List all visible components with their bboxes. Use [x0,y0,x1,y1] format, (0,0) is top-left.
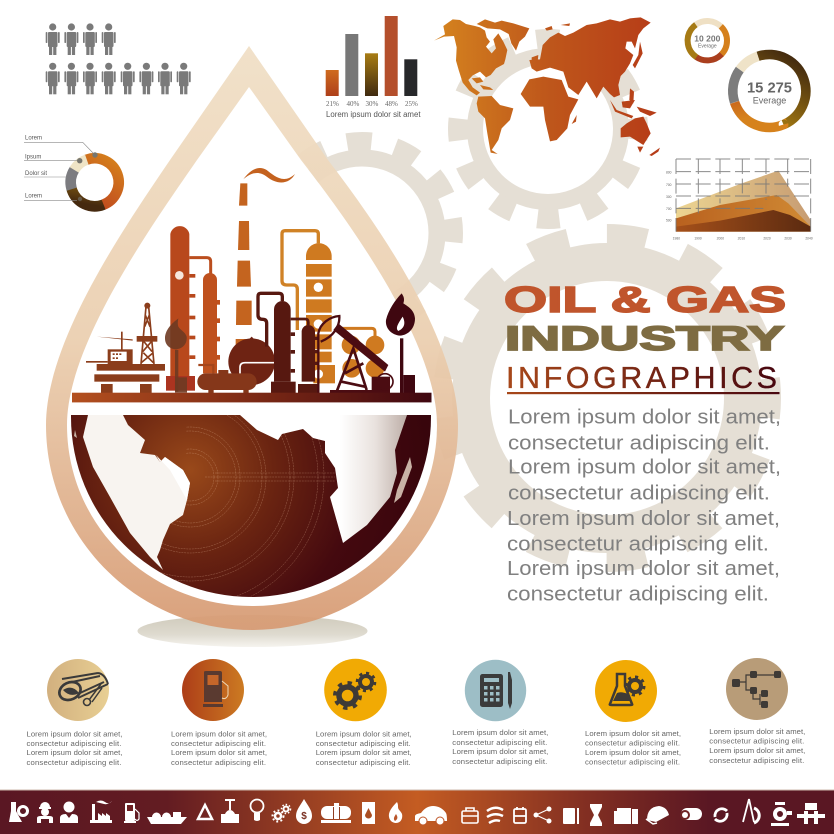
madagascar [572,115,577,124]
second red column [203,273,220,373]
caption 2: Lorem ipsum dolor sit amet, [171,748,267,757]
caption 4: Lorem ipsum dolor sit amet, [452,747,548,756]
oil drop frame [46,46,458,630]
large ring stat [718,40,820,142]
icon: worker [37,802,53,823]
caption 5: consectetur adipiscing elit. [585,757,680,766]
icon: flow tree [726,658,788,720]
tall red column [170,226,211,377]
caption 3: consectetur adipiscing elit. [316,758,411,767]
caribbean [480,85,493,90]
caption 2: consectetur adipiscing elit. [171,739,266,748]
icon: briefcase [462,808,478,823]
footer icon bar [0,790,834,834]
axis labels: 2030 [784,237,792,241]
gear: world map gear [448,29,648,229]
axis labels: 700 [666,207,672,211]
offshore platform [86,303,165,393]
caption 6 [709,727,805,765]
bar labels: 25% [405,100,418,108]
dark column [258,293,318,393]
icon: manager [60,802,78,823]
axis labels: 2000 [717,237,724,241]
caption 4: consectetur adipiscing elit. [452,738,547,747]
australia [621,117,651,145]
icon: calculator [563,808,579,824]
orange balls behind pumpjack [340,328,384,378]
donut chart with labels [24,136,128,215]
leader dots [77,152,98,201]
caption 5: consectetur adipiscing elit. [585,738,680,747]
small ring caption: Everage [698,43,717,49]
caption 3: consectetur adipiscing elit. [316,739,411,748]
chimney [236,183,253,367]
japan [633,42,643,68]
donut labels: Ipsum [25,154,41,160]
british isles [532,55,538,65]
bar labels: 40% [346,100,360,108]
caption 6: Lorem ipsum dolor sit amet, [709,727,805,736]
icon: drafting compass [743,799,759,823]
caption 5 [585,729,681,766]
icon: centrifugal pump [771,802,792,826]
icon: car [415,806,447,825]
icon: gears [324,659,387,721]
icon: hard hat [646,806,669,824]
icon: calculator and pen [465,660,526,721]
people pictogram [46,23,191,94]
africa [521,77,578,141]
caption 2: consectetur adipiscing elit. [171,758,266,767]
icon: pipeline valve [797,803,825,824]
pumpjack [318,316,393,393]
axis labels: 800 [666,171,672,175]
icon: box [614,808,638,824]
bar labels: 48% [385,100,398,108]
icon: fuel pump [182,659,244,721]
axis labels: 2020 [763,237,771,241]
drop shadow [138,615,368,647]
gear: large title gear [443,234,771,562]
body text: Lorem ipsum dolor sit amet, [508,456,781,478]
body text: consectetur adipiscing elit. [508,432,770,454]
body text [507,406,781,606]
icon: valve [221,799,239,823]
icon: barrel [362,802,375,824]
icon: fuel pump [124,803,139,823]
donut labels [25,136,47,200]
donut segments [62,149,128,215]
north america [434,19,507,95]
chart areas [676,171,811,232]
world map [434,17,660,156]
axis labels: 500 [666,219,672,223]
caption 3 [316,730,412,767]
right flare [386,293,415,393]
caption 6: consectetur adipiscing elit. [709,736,804,746]
title line 2: INDUSTRY [505,320,785,358]
sphere tank [228,337,275,385]
new guinea [637,107,657,116]
chart grid [676,159,811,232]
smoke plume [243,168,295,182]
refinery illustration [86,168,415,393]
donut labels: Dolor sit [25,171,47,177]
icon: recycle [198,805,212,819]
small ring value: 10 200 [694,34,721,44]
large ring caption: Everage [753,95,786,105]
south america [477,96,513,154]
new zealand [649,148,660,156]
eurasia [529,17,651,98]
axis labels: 300 [666,195,672,199]
caption 3: Lorem ipsum dolor sit amet, [316,730,412,738]
bar labels: 30% [366,100,378,108]
donut labels: Lorem [25,194,42,200]
orange distillation column [282,231,335,383]
greenland and arctic islands [477,19,529,51]
axis labels: 700 [666,183,672,187]
axis labels: 1980 [673,237,680,241]
gear: small centre gear [258,129,466,337]
icon: tanker ship [147,812,187,824]
icon: swirl arrows [487,808,503,823]
caption 2: Lorem ipsum dolor sit amet, [171,730,267,738]
caption 1: consectetur adipiscing elit. [26,758,122,767]
caption 5: Lorem ipsum dolor sit amet, [585,748,681,757]
caption 5: Lorem ipsum dolor sit amet, [585,729,681,738]
globe [71,415,431,597]
bar caption: Lorem ipsum dolor sit amet [326,110,421,119]
body text: consectetur adipiscing elit. [508,482,770,504]
donut labels: Lorem [25,136,42,142]
axis labels: 1990 [694,237,702,241]
icon: pipes [47,659,109,721]
icon: light bulb [250,800,264,821]
caption 2 [171,730,267,767]
axis labels [666,171,813,241]
ground bar [72,393,432,402]
caption 4: consectetur adipiscing elit. [452,757,547,766]
icon: oil money drop: $ [301,811,307,822]
large ring value: 15 275 [747,80,792,97]
person figures [46,23,191,94]
horizontal tank [197,365,257,393]
icon: flame [389,802,402,823]
icon: flask gear [9,802,28,822]
icon: cycle arrows [715,809,727,821]
icon: hourglass [590,804,602,826]
body text: Lorem ipsum dolor sit amet, [507,558,780,580]
sumatra and java [610,100,633,118]
iceland [545,26,553,31]
body text: Lorem ipsum dolor sit amet, [507,508,780,530]
axis labels: 2040 [805,237,813,241]
icon: flask and gear [595,660,657,722]
caption 1: Lorem ipsum dolor sit amet, [26,730,122,738]
icon: notepad [514,807,526,823]
axis labels: 2010 [738,237,745,241]
small ring stat [679,13,735,69]
icon: pipe section [680,808,702,820]
caption 4: Lorem ipsum dolor sit amet, [452,728,548,737]
title [504,279,786,395]
caption 1 [26,730,122,767]
philippines [629,88,634,103]
tasmania [637,147,643,153]
body text: consectetur adipiscing elit. [507,534,769,556]
area chart [666,159,813,241]
icon: oil money drop [296,799,312,824]
cuba [472,77,483,83]
caption 6: consectetur adipiscing elit. [709,756,804,765]
caption 4 [452,728,548,766]
title line 1: OIL & GAS [504,279,786,320]
caption 6: Lorem ipsum dolor sit amet, [709,746,805,755]
left flare [165,318,187,393]
icon: tanker [321,803,351,823]
body text: Lorem ipsum dolor sit amet, [508,406,781,428]
bar labels [326,100,418,108]
leader lines [24,142,95,200]
borneo [622,100,635,108]
body text: consectetur adipiscing elit. [507,584,769,606]
bar chart [326,16,421,119]
bar labels: 21% [326,100,339,108]
icon: gears [272,804,290,822]
caption 1: consectetur adipiscing elit. [26,739,122,748]
svalbard [561,23,570,26]
caption 3: Lorem ipsum dolor sit amet, [316,748,412,757]
caption 1: Lorem ipsum dolor sit amet, [26,748,122,757]
icon: share network [534,806,552,824]
title line 3: INFOGRAPHICS [506,361,777,395]
icon: factory [90,800,112,823]
red base block [166,376,195,391]
title underline [507,392,780,394]
